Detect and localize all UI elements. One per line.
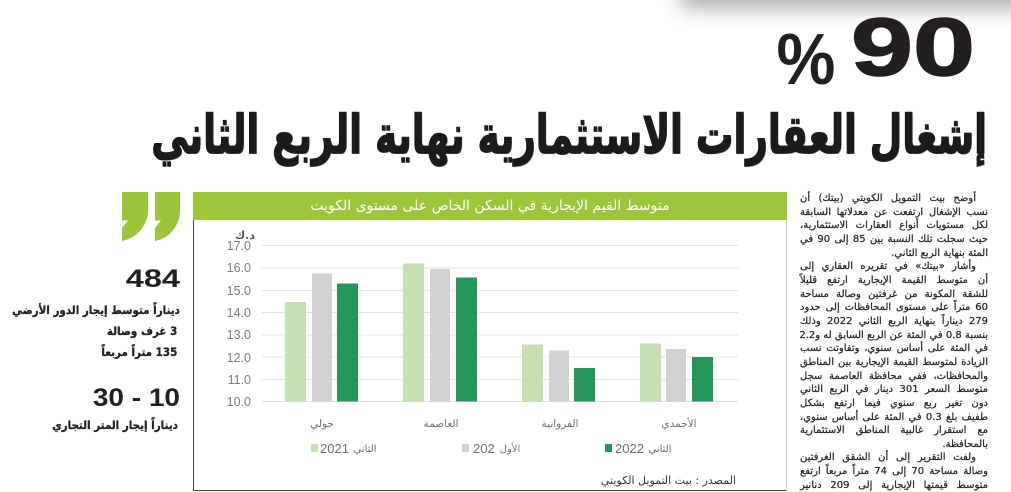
article text column: بنسبة 0.8 في المئة عن الربع السابق له و2.2	[799, 330, 988, 341]
legend: 2022	[615, 441, 644, 456]
category labels: حولي	[310, 418, 334, 430]
title: إشغال العقارات الاستثمارية نهاية الربع الثاني	[151, 104, 987, 166]
stat 484 caption: ديناراً متوسط إيجار الدور الأرضي	[12, 303, 180, 317]
stat 484 caption: 3 غرف وصالة	[107, 324, 177, 338]
y axis labels: 15.0	[227, 284, 251, 298]
article text column: وصالة مساحة 70 إلى 74 متراً مربعاً ارتفع	[800, 466, 988, 477]
article text column	[799, 190, 988, 491]
bars: Capital	[403, 264, 477, 402]
stat 484 caption	[12, 302, 180, 360]
article text column: لكل مستويات أنواع العقارات الاستثمارية،	[800, 220, 988, 231]
article text column: وأشار «بيتك» في تقريره العقاري إلى	[800, 261, 976, 272]
article text column: في المئة على أساس سنوي، وتفاوتت نسب	[800, 343, 988, 354]
article text column: حيث سجلت تلك النسبة بين 85 إلى 90 في	[800, 234, 988, 245]
article text column: نسب الإشغال ارتفعت عن معدلاتها السابقة	[800, 207, 988, 218]
article text column: مع استقرار غالبية المناطق الاستثمارية	[800, 425, 988, 436]
y axis labels	[227, 239, 251, 409]
article text column: بالمحافظة.	[942, 439, 988, 450]
category labels: العاصمة	[424, 418, 458, 430]
article text column: أوضح بيت التمويل الكويتي (بيتك) أن	[800, 193, 976, 204]
percent sign: %	[777, 20, 835, 100]
y axis labels: 11.0	[228, 373, 251, 387]
category labels: الأحمدي	[661, 417, 697, 430]
article text column: طفيف بلغ 0.3 في المئة على أساس سنوي،	[800, 412, 988, 422]
stat 484 caption: 135 متراً مربعاً	[101, 345, 177, 359]
bars: Ahmadi	[640, 344, 713, 402]
article text column: للشقة المكونة من غرفتين وصالة مساحة	[800, 289, 988, 300]
article text column: 60 متراً على مستوى المحافظات إلى حدود	[800, 302, 988, 313]
stat 10-30 caption: ديناراً إيجار المتر التجاري	[52, 418, 178, 432]
y axis labels: 12.0	[227, 351, 251, 365]
bars: Farwaniya	[522, 344, 595, 402]
panel: rental chart	[193, 192, 787, 491]
legend	[311, 441, 672, 456]
chart heading: متوسط القيم الإيجارية في السكن الخاص على مستوى الكويت	[310, 198, 670, 214]
legend: 2021	[320, 441, 349, 456]
article text column: أن متوسط القيمة الإيجارية ارتفع قليلاً	[800, 275, 988, 286]
source note: المصدر : بيت التمويل الكويتي	[601, 474, 736, 487]
stat: 10 - 30: 30 - 10	[93, 384, 180, 412]
big number: 90: 90	[851, 2, 975, 93]
article text column: والمحافظات، ففي محافظة العاصمة سجل	[800, 370, 988, 382]
chart heading	[193, 192, 787, 220]
legend: الثاني	[353, 444, 377, 455]
article text column: متوسط قيمتها الإيجارية إلى 209 دنانير	[800, 480, 988, 491]
y axis labels: 14.0	[227, 306, 251, 320]
bar chart	[227, 229, 738, 487]
article text column: الزيادة لمتوسط القيمة الإيجارية بين المناطق	[800, 357, 988, 368]
article text column: دون تغير ربع سنوي فيما ارتفع بشكل	[800, 398, 988, 409]
stat number 484: 484	[126, 265, 180, 293]
y axis unit: د.ك	[235, 229, 255, 242]
legend: الثاني	[648, 444, 672, 455]
article text column: 279 ديناراً بنهاية الربع الثاني 2022 وذلك	[800, 316, 988, 327]
bars: Hawally	[285, 274, 358, 402]
article text column: ولفت التقرير إلى أن الشقق الغرفتين	[800, 452, 976, 463]
category labels: الفروانية	[542, 418, 578, 430]
icon: green quotation marks	[122, 192, 180, 241]
category labels	[310, 417, 697, 430]
legend: 202	[473, 441, 495, 456]
y axis labels: 17.0	[227, 239, 251, 253]
legend: الأول	[500, 442, 520, 455]
y axis labels: 13.0	[227, 328, 251, 342]
article text column: متوسط السعر 301 دينار في الربع الثاني	[800, 384, 988, 395]
article text column: المئة بنهاية الربع الثاني.	[891, 248, 988, 259]
y axis labels: 10.0	[227, 395, 251, 409]
y axis labels: 16.0	[227, 261, 251, 275]
